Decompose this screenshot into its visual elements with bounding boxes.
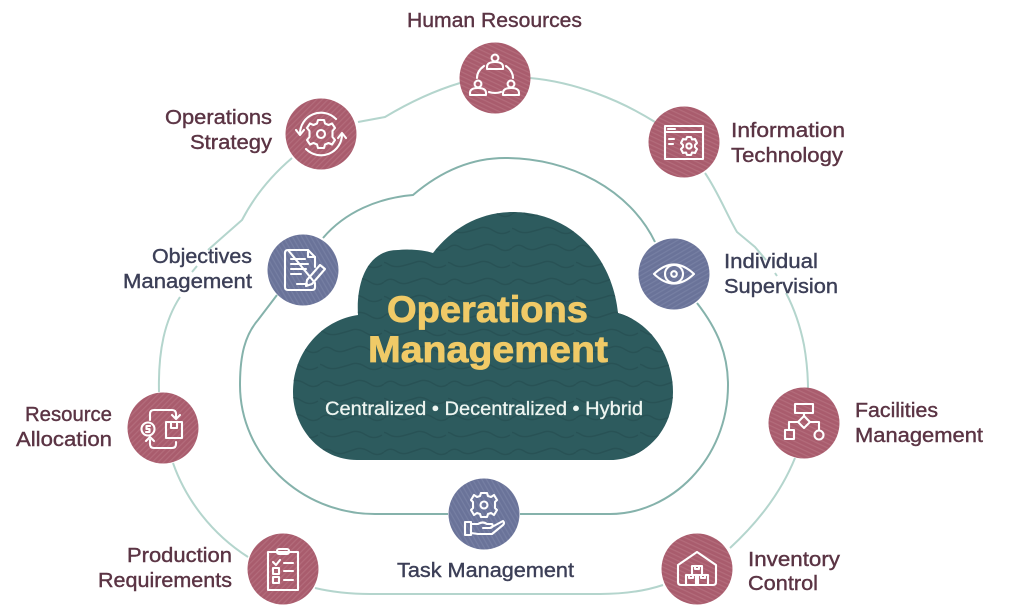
icon: flowchart — [785, 404, 824, 440]
badge — [648, 106, 720, 178]
label: Inventory Control — [748, 548, 841, 595]
central cloud — [293, 212, 673, 460]
node: Individual Supervision — [638, 238, 710, 310]
title — [368, 289, 608, 370]
label: Inventory Control: Control — [748, 572, 818, 595]
label: Facilities Management: Management — [855, 424, 983, 447]
node: Task Management — [448, 478, 520, 550]
label: Human Resources: Human Resources — [407, 9, 582, 32]
icon: gear over hand — [465, 493, 504, 535]
badge — [448, 478, 520, 550]
label: Production Requirements: Production — [127, 544, 232, 567]
label: Production Requirements: Requirements — [98, 569, 232, 592]
label: Information Technology: Information — [731, 119, 845, 142]
label: Individual Supervision: Individual — [724, 250, 818, 273]
node: Operations Strategy — [286, 98, 356, 170]
icon: team cycle — [470, 55, 519, 95]
label: Production Requirements — [98, 544, 232, 592]
node: Facilities Management — [768, 388, 840, 458]
label: Resource Allocation — [16, 403, 112, 451]
node: Inventory Control — [662, 534, 732, 604]
outer cloud outline — [159, 78, 808, 594]
label: Facilities Management — [855, 399, 983, 447]
label: Information Technology: Technology — [731, 144, 844, 167]
label: Operations Strategy: Operations — [165, 106, 272, 129]
node: Production Requirements — [248, 534, 318, 604]
label: Resource Allocation: Resource — [25, 403, 112, 426]
label: Inventory Control: Inventory — [748, 548, 841, 571]
badge — [128, 392, 198, 464]
inner cloud outline — [240, 158, 728, 514]
label: Information Technology — [731, 119, 845, 167]
badge — [460, 42, 530, 114]
label: Objectives Management: Objectives — [152, 245, 252, 268]
icon: clipboard checklist — [268, 549, 298, 590]
badge — [248, 534, 318, 604]
node: Information Technology — [648, 106, 720, 178]
icon: browser gear — [665, 126, 703, 159]
badge — [638, 238, 710, 310]
icon: gear cycle — [296, 113, 346, 155]
title: Operations — [387, 289, 588, 330]
label: Objectives Management: Management — [123, 270, 252, 293]
badge — [768, 388, 840, 458]
node: Human Resources — [460, 42, 530, 114]
label: Objectives Management — [123, 245, 252, 293]
label: Individual Supervision: Supervision — [724, 275, 838, 298]
node: Objectives Management — [268, 234, 338, 306]
label: Task Management: Task Management — [397, 559, 574, 582]
title: Management — [368, 329, 608, 370]
icon: document and pen — [285, 250, 325, 290]
badge — [268, 234, 338, 306]
badge — [662, 534, 732, 604]
label: Operations Strategy — [165, 106, 273, 154]
icon: eye — [654, 264, 694, 284]
label: Operations Strategy: Strategy — [190, 131, 273, 154]
label: Individual Supervision — [724, 250, 838, 298]
icon: warehouse with boxes — [678, 552, 716, 585]
cloud shape — [293, 212, 673, 460]
badge — [286, 98, 356, 170]
label: Resource Allocation: Allocation — [16, 428, 112, 451]
subtitle: Centralized • Decentralized • Hybrid — [325, 399, 643, 420]
node: Resource Allocation — [128, 392, 198, 464]
label: Facilities Management: Facilities — [855, 399, 938, 422]
cloud texture — [293, 212, 673, 460]
icon: money and package exchange — [142, 410, 182, 448]
